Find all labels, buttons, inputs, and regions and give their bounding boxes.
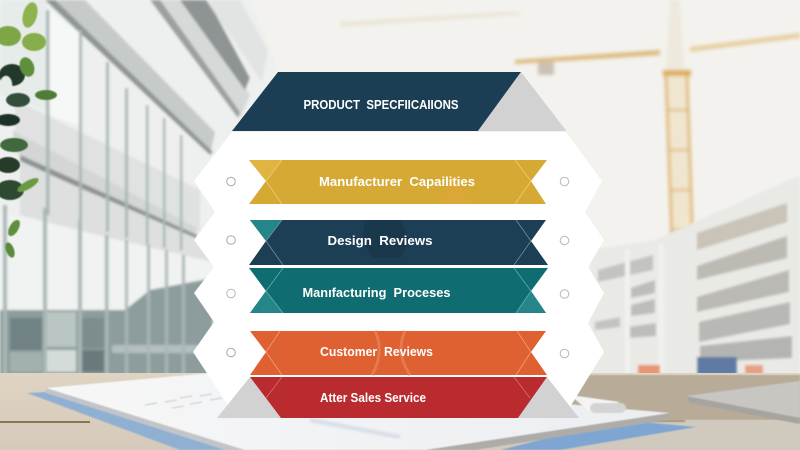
right marker	[560, 349, 569, 358]
right marker	[560, 177, 569, 186]
label: Manıfacturing Proceses	[302, 285, 450, 300]
reflected building in glass	[0, 278, 213, 375]
crane	[340, 0, 800, 375]
mullions	[3, 10, 185, 375]
right marker	[560, 290, 569, 298]
label: Design Reviews	[328, 233, 432, 248]
left marker	[227, 348, 235, 357]
upper windows	[48, 8, 80, 125]
wooden desk	[0, 373, 800, 450]
right grey triangle	[518, 377, 579, 418]
label: Customer Reviews	[320, 344, 433, 359]
left marker	[227, 236, 235, 244]
left grey triangle	[217, 377, 282, 418]
header title: PRODUCT SPECFIICAIIONS	[304, 97, 459, 112]
banner: after sales service	[217, 377, 579, 418]
banner: manufacturer capabilities	[227, 160, 569, 204]
label: Manufacturer Capailities	[319, 174, 475, 189]
top spandrel row	[15, 100, 200, 232]
banner: design reviews	[227, 220, 569, 265]
white chevron backing panel	[193, 132, 604, 407]
banner: customer reviews	[227, 331, 569, 375]
header grey triangle	[478, 72, 566, 131]
horizontal band	[13, 130, 197, 237]
left marker	[227, 289, 235, 298]
label: Atter Sales Service	[320, 390, 426, 405]
beams	[45, 0, 215, 155]
lower spandrel row	[20, 162, 212, 265]
header banner: product specifications	[232, 72, 566, 131]
documents on desk	[27, 373, 696, 450]
banner: manufacturing processes	[227, 268, 569, 313]
left marker	[227, 177, 235, 186]
left glass building	[0, 0, 275, 375]
right building	[590, 175, 800, 375]
lower windows	[0, 212, 212, 375]
laptop	[686, 381, 800, 424]
plant leaves	[0, 1, 57, 259]
right marker	[560, 236, 569, 245]
